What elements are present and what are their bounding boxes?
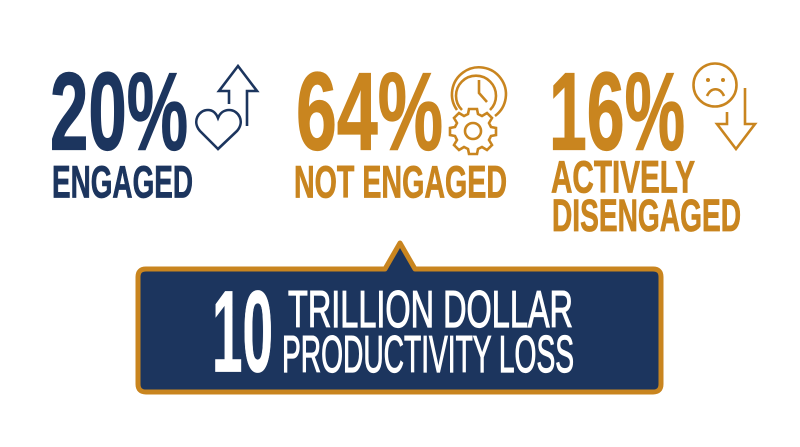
icon: sad face with down arrow <box>694 64 755 149</box>
label: not engaged: NOT ENGAGED <box>294 156 507 208</box>
callout: productivity loss: 10 <box>212 266 273 396</box>
label: actively: ACTIVELY <box>551 152 695 202</box>
icon: heart with up arrow <box>196 66 257 149</box>
stat: 16% actively disengaged <box>549 50 755 241</box>
callout box <box>138 243 661 392</box>
label: engaged: ENGAGED <box>52 156 193 208</box>
percentage: 20%: 20% <box>50 50 188 174</box>
percentage: 16%: 16% <box>549 50 685 174</box>
percentage: 64%: 64% <box>296 50 443 174</box>
stat: 64% not engaged <box>294 50 507 208</box>
stat: 20% engaged <box>50 50 257 208</box>
icon: clock and gear <box>450 67 506 154</box>
text: trillion dollar: TRILLION DOLLAR <box>288 281 573 339</box>
callout: productivity loss <box>138 243 661 396</box>
